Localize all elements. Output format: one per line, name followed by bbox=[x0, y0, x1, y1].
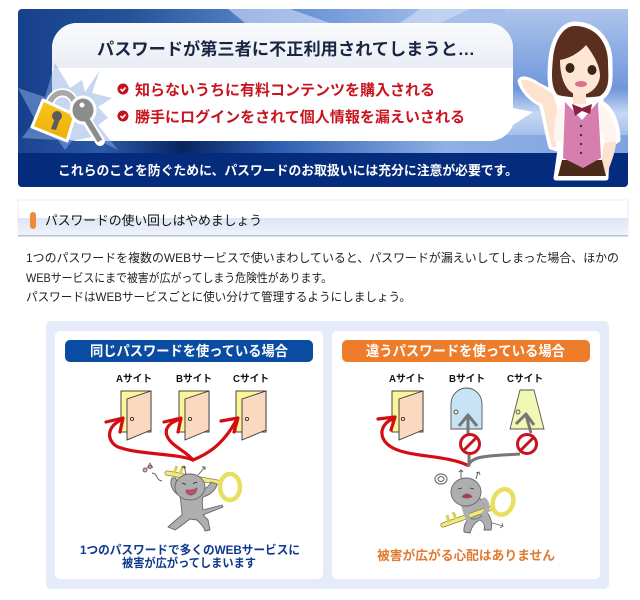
left sleeve bbox=[554, 104, 563, 143]
woman character bbox=[520, 24, 618, 178]
key ring bbox=[220, 474, 240, 500]
hair bbox=[552, 26, 608, 97]
intro paragraph bbox=[26, 250, 619, 304]
gray creature with key bbox=[143, 463, 240, 531]
mouth bbox=[186, 488, 197, 495]
red arrow to door A bbox=[378, 417, 467, 465]
banner bbox=[18, 9, 628, 187]
body bbox=[463, 497, 485, 519]
forearm and hand bbox=[521, 80, 557, 147]
speech bubble bbox=[52, 23, 533, 141]
panel heading: same password: 同じパスワードを使っている場合 bbox=[90, 343, 288, 359]
gray blocked arrows bbox=[459, 414, 534, 467]
door B bbox=[179, 391, 209, 440]
section heading bbox=[18, 200, 628, 236]
panel: different passwords bbox=[332, 331, 600, 579]
site labels: Cサイト bbox=[507, 373, 543, 385]
caption: 被害が広がる心配はありません bbox=[377, 548, 555, 563]
panel heading: different passwords: 違うパスワードを使っている場合 bbox=[366, 343, 565, 359]
orange marker bbox=[30, 212, 36, 229]
panel: same password bbox=[55, 331, 323, 579]
site labels bbox=[389, 373, 543, 385]
vest buttons bbox=[580, 125, 582, 154]
heading text: パスワードの使い回しはやめましょう bbox=[45, 213, 262, 228]
intro paragraph: 1つのパスワードを複数のWEBサービスで使いまわしていると、パスワードが漏えいしてしまった場合、ほかの bbox=[26, 250, 619, 265]
mouth bbox=[462, 494, 472, 498]
door A bbox=[392, 391, 423, 440]
mouth bbox=[575, 81, 587, 87]
legs bbox=[464, 510, 492, 533]
intro paragraph: WEBサービスにまで被害が広がってしまう危険性があります。 bbox=[26, 270, 332, 285]
antennae bbox=[182, 466, 205, 475]
site labels bbox=[116, 373, 269, 385]
lower right arm bbox=[600, 141, 616, 176]
starburst behind lock bbox=[18, 63, 118, 150]
caption: 被害が広がってしまいます bbox=[122, 555, 256, 570]
warning item 1: 知らないうちに有料コンテンツを購入される bbox=[135, 81, 435, 99]
head bbox=[451, 478, 481, 506]
icon: key bbox=[71, 97, 100, 141]
site labels: Aサイト bbox=[116, 373, 152, 385]
light beams bbox=[228, 9, 470, 153]
navy footer band bbox=[18, 153, 628, 187]
tail bbox=[485, 521, 503, 528]
panel heading: same password bbox=[65, 340, 313, 362]
bubble title: パスワードが第三者に不正利用されてしまうと… bbox=[97, 39, 475, 59]
red arrows to all doors bbox=[106, 418, 238, 460]
creature head bbox=[175, 474, 205, 500]
face bbox=[560, 45, 600, 95]
band under bubble bbox=[18, 135, 628, 153]
vest bbox=[563, 102, 601, 168]
creature body and limbs bbox=[168, 478, 223, 531]
white silhouette outline bbox=[520, 24, 618, 178]
key shaft and teeth bbox=[167, 473, 222, 483]
antennae bbox=[459, 470, 480, 479]
intro paragraph: パスワードはWEBサービスごとに使い分けて管理するようにしましょう。 bbox=[26, 289, 411, 304]
prohibition signs bbox=[460, 434, 536, 454]
icon: padlock bbox=[32, 93, 76, 141]
panel heading: different passwords bbox=[342, 340, 590, 362]
site labels: Bサイト bbox=[176, 373, 212, 385]
door A bbox=[121, 391, 151, 440]
music note bbox=[146, 463, 153, 470]
right sleeve bbox=[600, 104, 617, 143]
eyes bbox=[182, 482, 197, 484]
warning item 2: 勝手にログインをされて個人情報を漏えいされる bbox=[135, 108, 465, 126]
right side glow bbox=[505, 9, 628, 154]
door C bbox=[236, 391, 266, 440]
caption bbox=[80, 542, 300, 570]
skirt bbox=[558, 160, 606, 176]
worry swirl bbox=[435, 474, 447, 484]
arched door B bbox=[451, 388, 482, 429]
key ring bbox=[489, 486, 517, 518]
comparison panel bbox=[46, 321, 609, 589]
site labels: Cサイト bbox=[233, 373, 269, 385]
trapezoid door C bbox=[510, 390, 544, 429]
eyes bbox=[566, 63, 596, 75]
site labels: Bサイト bbox=[449, 373, 485, 385]
banner background bbox=[18, 9, 628, 187]
neck bbox=[573, 90, 586, 104]
caption: 1つのパスワードで多くのWEBサービスに bbox=[80, 542, 300, 557]
gray creature with key bbox=[435, 470, 517, 533]
footer text: これらのことを防ぐために、パスワードのお取扱いには充分に注意が必要です。 bbox=[58, 163, 518, 178]
site labels: Aサイト bbox=[389, 373, 425, 385]
bow bbox=[572, 104, 592, 116]
eyes bbox=[458, 488, 474, 489]
arms bbox=[463, 500, 487, 518]
key shaft and teeth bbox=[443, 506, 497, 525]
